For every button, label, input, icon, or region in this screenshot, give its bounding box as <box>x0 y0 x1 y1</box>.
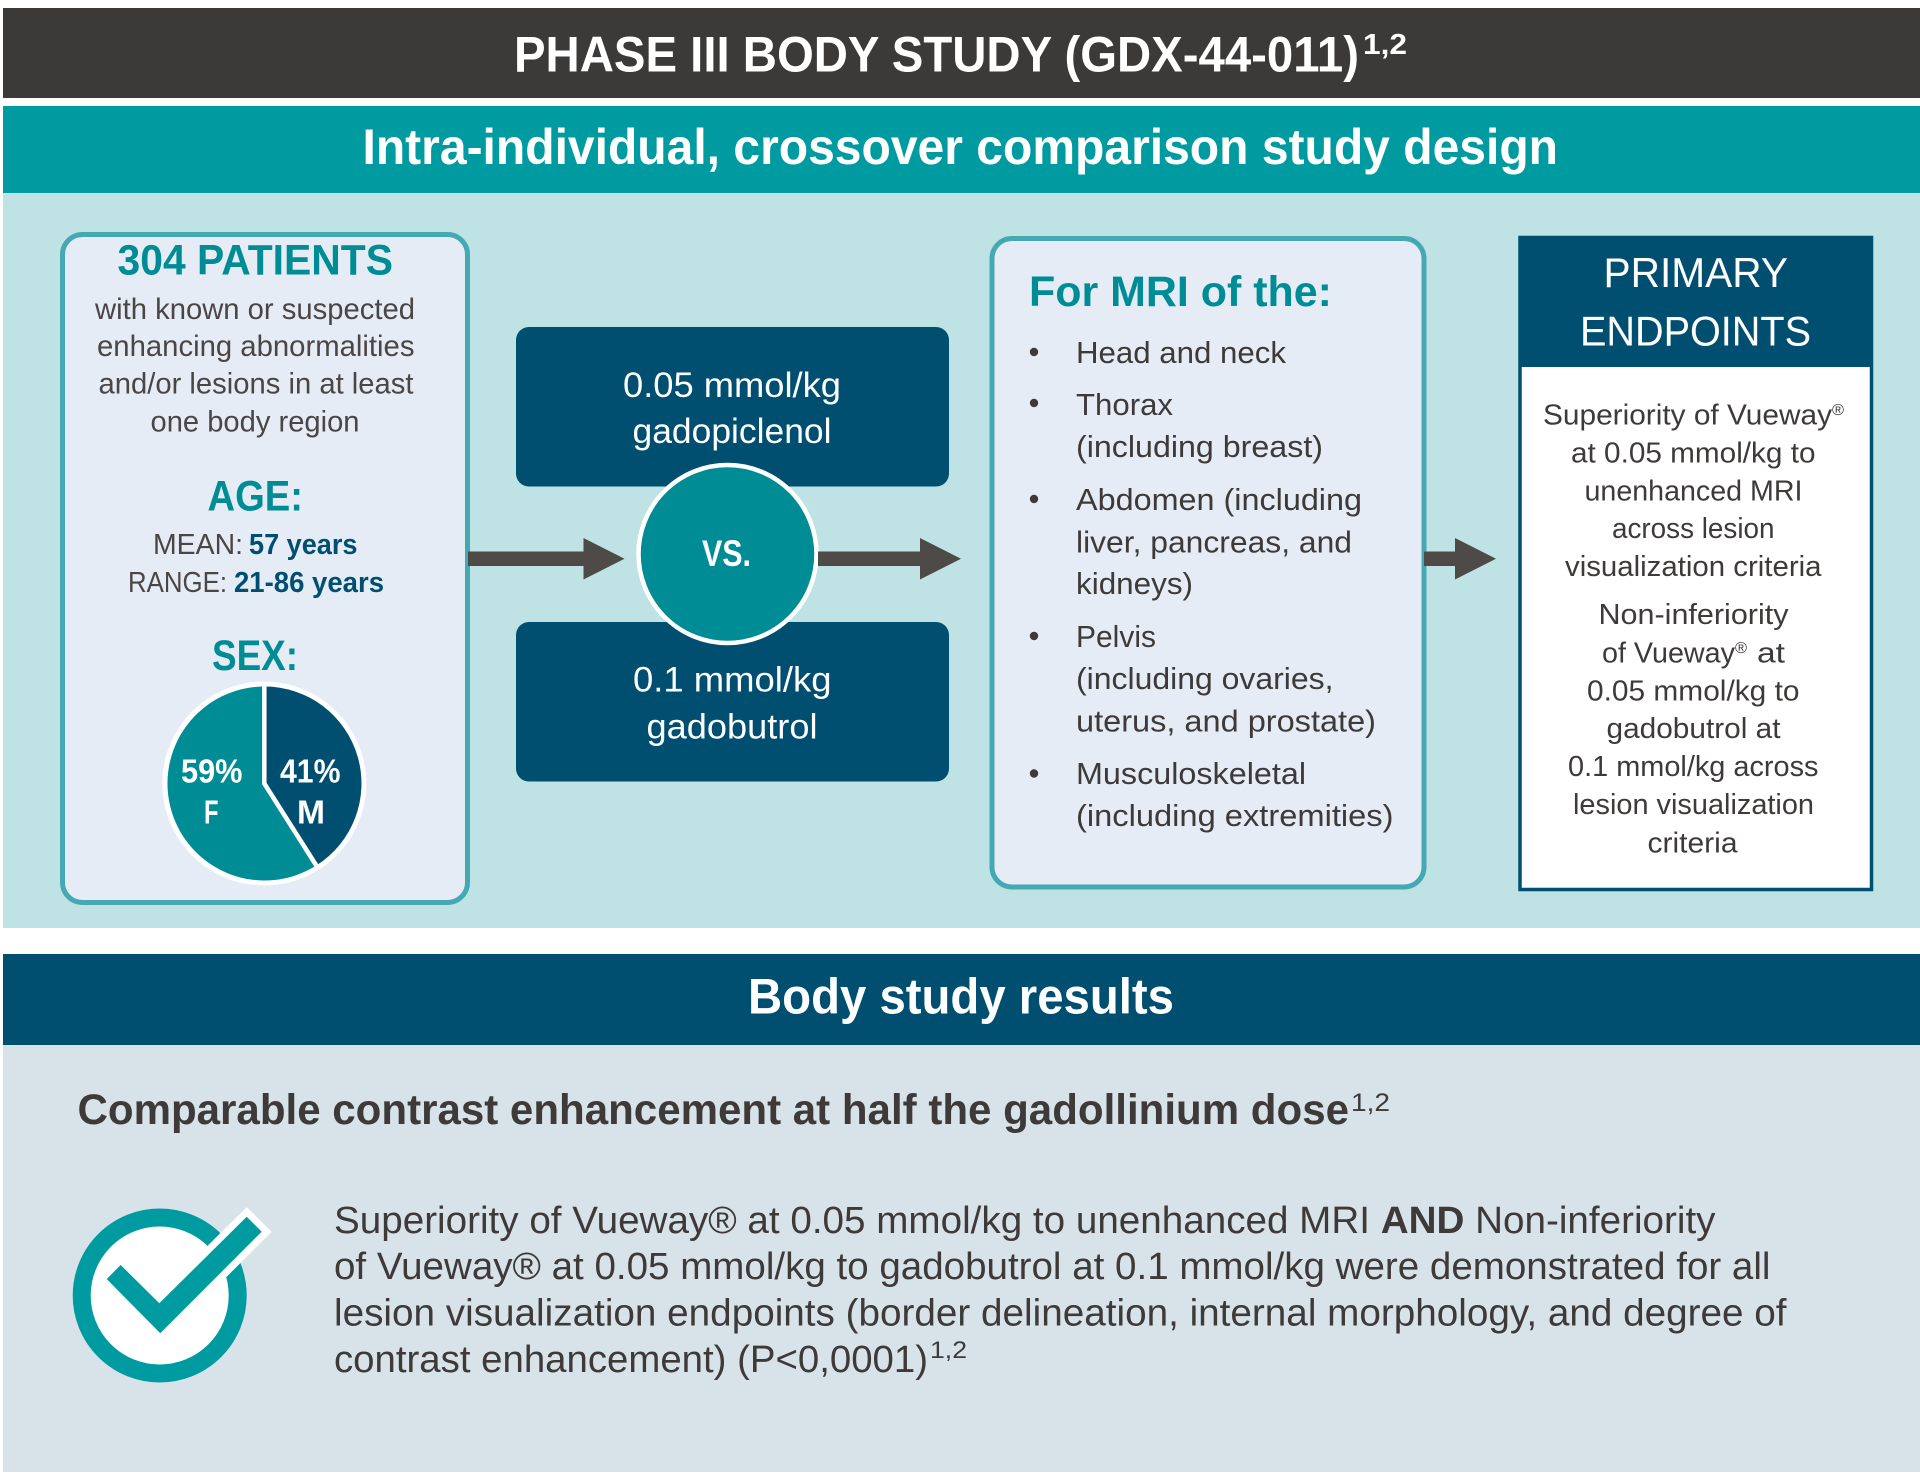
panel: MRI body regions <box>992 238 1424 887</box>
study design heading <box>3 106 1920 193</box>
endpoint text: non-inferiority: at <box>1757 638 1785 670</box>
panel: primary endpoints: PRIMARY <box>1604 249 1788 296</box>
panel: patient population: and/or lesions in at least <box>98 368 414 400</box>
results text <box>334 1200 1787 1381</box>
panel: patient population: 304 PATIENTS <box>118 236 393 284</box>
bullet list: regions: (including ovaries, <box>1076 661 1334 696</box>
results heading <box>3 954 1920 1045</box>
bullet list: regions: uterus, and prostate) <box>1076 704 1376 738</box>
results text: 1,2 <box>930 1337 967 1364</box>
title banner <box>3 8 1920 98</box>
endpoint text: superiority: ® <box>1832 402 1844 419</box>
results text: of Vueway® at 0.05 mmol/kg to gadobutrol at 0.1 mmol/kg were demonstrated for all <box>334 1246 1771 1288</box>
bullet list: regions: kidneys) <box>1076 566 1193 601</box>
bullet list: regions: (including breast) <box>1076 429 1323 464</box>
arrow: doses to MRI regions <box>818 538 961 580</box>
pie chart: sex: 41% <box>280 752 340 790</box>
endpoint text: superiority <box>1543 400 1844 583</box>
panel: patient population: RANGE: <box>128 567 227 599</box>
box: gadobutrol dose <box>516 622 949 782</box>
panel: results <box>3 1045 1920 1472</box>
bullet list: regions: Head and neck <box>1076 335 1286 370</box>
bullet list: regions: liver, pancreas, and <box>1076 524 1352 560</box>
title banner: PHASE III BODY STUDY (GDX-44-011) <box>514 26 1359 82</box>
results text: lesion visualization endpoints (border delineation, internal morphology, and degree of <box>334 1292 1787 1334</box>
endpoint text: non-inferiority: 0.1 mmol/kg across <box>1568 751 1818 783</box>
bullet list: regions: Musculoskeletal <box>1076 756 1306 791</box>
circle: versus: VS. <box>702 533 751 574</box>
box: gadobutrol dose: gadobutrol <box>646 708 818 746</box>
bullet list: regions: Abdomen (including <box>1076 482 1362 517</box>
endpoint text: non-inferiority: gadobutrol at <box>1606 713 1781 745</box>
box: gadopiclenol dose <box>516 327 949 486</box>
pie chart: sex: M <box>297 794 325 830</box>
results subheading: 1,2 <box>1351 1089 1390 1117</box>
bullet list: regions <box>1030 335 1394 833</box>
endpoint text: non-inferiority: ® <box>1735 640 1747 657</box>
pie chart: sex: 59% <box>181 752 242 790</box>
endpoint text: non-inferiority: Non-inferiority <box>1598 599 1789 631</box>
endpoint text: non-inferiority: 0.05 mmol/kg to <box>1587 676 1800 708</box>
title banner: 1,2 <box>1363 29 1407 61</box>
endpoint text: superiority: Superiority of Vueway <box>1543 400 1833 432</box>
pie chart: sex: F <box>204 795 219 832</box>
circle: versus <box>638 465 816 643</box>
results text: contrast enhancement) (P<0,0001) <box>334 1339 928 1381</box>
results subheading: Comparable contrast enhancement at half the gadollinium dose <box>78 1086 1349 1134</box>
results heading: Body study results <box>748 968 1174 1024</box>
endpoint text: non-inferiority <box>1568 599 1818 860</box>
panel: patient population: AGE: <box>208 472 303 520</box>
panel: MRI body regions: For MRI of the: <box>1029 268 1332 316</box>
arrow: MRI regions to endpoints <box>1424 538 1496 580</box>
pie chart: sex <box>162 682 366 886</box>
endpoint text: superiority: unenhanced MRI <box>1584 476 1802 508</box>
bullet list: regions: Thorax <box>1076 387 1173 422</box>
endpoint text: non-inferiority: criteria <box>1648 828 1738 860</box>
results text: Superiority of Vueway® at 0.05 mmol/kg to unenhanced MRI AND Non-inferiority <box>334 1200 1716 1242</box>
panel: patient population: 21-86 years <box>234 567 384 599</box>
icon: check mark <box>82 1207 272 1374</box>
bullet list: regions: Pelvis <box>1076 619 1156 654</box>
box: gadobutrol dose: 0.1 mmol/kg <box>633 660 832 700</box>
endpoint text: superiority: across lesion <box>1612 513 1774 545</box>
panel: patient population: with known or suspected <box>94 293 415 326</box>
endpoint text: superiority: visualization criteria <box>1565 551 1822 583</box>
panel: patient population: 57 years <box>249 529 358 561</box>
endpoint text: non-inferiority: of Vueway <box>1602 638 1736 670</box>
arrow: patients to doses <box>468 538 624 580</box>
panel: patient population: enhancing abnormalities <box>97 330 414 363</box>
study design heading: Intra-individual, crossover comparison study design <box>362 119 1558 175</box>
panel: patient population: one body region <box>150 406 360 438</box>
panel: patient population: SEX: <box>212 632 298 680</box>
endpoint text: non-inferiority: lesion visualization <box>1573 789 1814 821</box>
bullet list: regions: (including extremities) <box>1076 798 1394 833</box>
box: gadopiclenol dose: gadopiclenol <box>632 412 832 451</box>
box: gadopiclenol dose: 0.05 mmol/kg <box>623 366 841 405</box>
panel: study design <box>3 193 1920 928</box>
panel: patient population <box>62 234 468 902</box>
panel: primary endpoints <box>1518 236 1873 890</box>
endpoint text: superiority: at 0.05 mmol/kg to <box>1571 438 1816 470</box>
panel: patient population: MEAN: <box>153 529 243 561</box>
panel: primary endpoints: ENDPOINTS <box>1580 308 1811 354</box>
